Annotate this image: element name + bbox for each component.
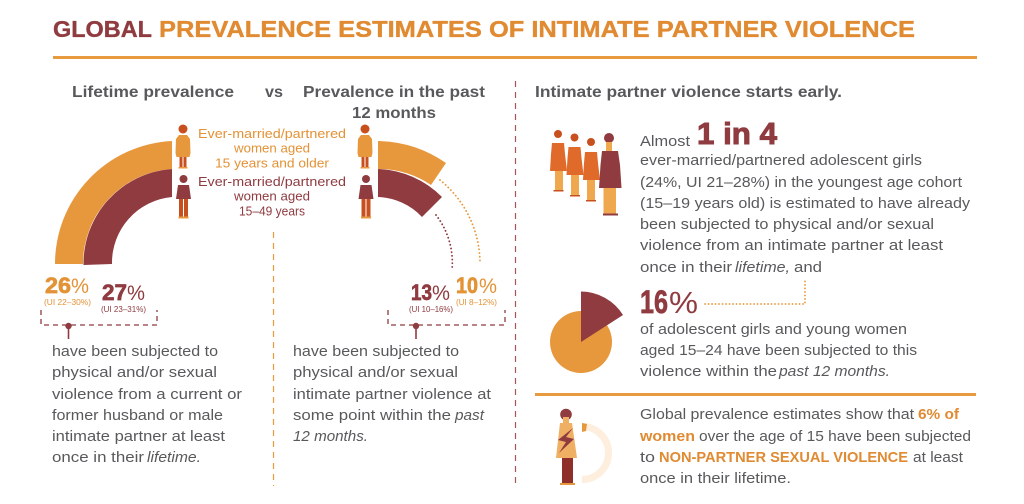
legend: women aged 15 and older: 15 years and older bbox=[215, 156, 330, 170]
text: young women: violence within the bbox=[640, 363, 777, 380]
section headings: Prevalence in the past bbox=[303, 84, 485, 101]
icon: younger woman left bbox=[176, 175, 191, 218]
text: adolescent girls: once in their bbox=[640, 259, 732, 276]
stat: 27 percent: 27 bbox=[102, 280, 127, 305]
stat: 26 percent: (UI 22–30%) bbox=[44, 297, 91, 307]
legend: women aged 15 to 49: Ever-married/partnered bbox=[198, 174, 346, 189]
text: past 12 months description: some point within the bbox=[293, 407, 451, 424]
text: young women: past 12 months. bbox=[778, 363, 890, 380]
legend: women aged 15 and older bbox=[198, 126, 346, 170]
legend: women aged 15 to 49: women aged bbox=[233, 188, 310, 204]
text: past 12 months description: have been subjected to bbox=[293, 343, 459, 360]
chart: pie 16 percent bbox=[550, 292, 623, 373]
text: lifetime description: once in their bbox=[52, 449, 144, 466]
stat: 13 percent: (UI 10–16%) bbox=[409, 304, 453, 314]
text: adolescent girls: lifetime, bbox=[735, 259, 790, 276]
stat: 27 percent bbox=[101, 280, 146, 314]
title: PREVALENCE ESTIMATES OF INTIMATE PARTNER VIOLENCE bbox=[159, 16, 915, 42]
text: adolescent girls: ever-married/partnered adolescent girls bbox=[640, 152, 922, 169]
section headings: 12 months bbox=[352, 105, 436, 122]
text: past 12 months description: 12 months. bbox=[293, 428, 368, 445]
section headings: Intimate partner violence starts early. bbox=[535, 84, 842, 101]
text: lifetime description: violence from a current or bbox=[52, 386, 242, 403]
text: lifetime description: have been subjected to bbox=[52, 343, 218, 360]
stat: 27 percent: (UI 23–31%) bbox=[101, 304, 146, 314]
stat: 27 percent: % bbox=[127, 282, 145, 305]
legend: women aged 15 and older: women aged bbox=[233, 140, 310, 156]
text: past 12 months description bbox=[293, 343, 492, 445]
stat: 26 percent: 26 bbox=[45, 273, 71, 298]
stat: 26 percent: % bbox=[71, 275, 89, 298]
text: past 12 months description: intimate partner violence at bbox=[293, 386, 492, 403]
stat: 10 percent: (UI 8–12%) bbox=[456, 297, 497, 307]
text: young women: aged 15–24 have been subjected to this bbox=[640, 342, 917, 359]
text: lifetime description bbox=[52, 343, 242, 466]
text: non-partner sexual violence: at least bbox=[913, 449, 964, 466]
text: non-partner sexual violence: 6% of bbox=[918, 406, 960, 423]
chart: lifetime prevalence arcs bbox=[55, 141, 172, 265]
text: adolescent girls: and bbox=[794, 259, 822, 276]
text: non-partner sexual violence: NON-PARTNER SEXUAL VIOLENCE bbox=[659, 449, 908, 466]
text: lifetime description: intimate partner at least bbox=[52, 428, 226, 445]
text: lifetime description: physical and/or sexual bbox=[52, 364, 217, 381]
icon: group of four women bbox=[550, 130, 622, 216]
icon: older woman right bbox=[358, 124, 372, 168]
text: adolescent girls: (24%, UI 21–28%) in the youngest age cohort bbox=[640, 174, 963, 191]
stat: 13 percent bbox=[409, 280, 453, 314]
stat: 13 percent: 13 bbox=[411, 280, 432, 305]
stat: 10 percent: % bbox=[479, 275, 497, 298]
stat: 10 percent: 10 bbox=[456, 273, 478, 298]
section headings: vs bbox=[265, 84, 283, 101]
text: non-partner sexual violence: Global prevalence estimates show that bbox=[640, 406, 915, 423]
text: lifetime description: former husband or male bbox=[52, 407, 223, 424]
text: non-partner sexual violence: once in their lifetime. bbox=[640, 470, 791, 487]
text: lifetime description: lifetime. bbox=[147, 449, 201, 466]
stat: 1 in 4: Almost bbox=[640, 133, 691, 150]
section headings bbox=[72, 84, 842, 122]
icon: younger woman right bbox=[358, 175, 374, 218]
icon: older woman left bbox=[176, 124, 190, 168]
title: GLOBAL bbox=[53, 16, 152, 42]
text: adolescent girls: (15–19 years old) is estimated to have already bbox=[640, 195, 971, 212]
section headings: Lifetime prevalence bbox=[72, 84, 234, 101]
stat: 16 percent: 16 bbox=[640, 284, 668, 320]
stat: 13 percent: % bbox=[432, 282, 450, 305]
text: non-partner sexual violence: women bbox=[639, 428, 695, 445]
chart: past 12 months arcs bbox=[378, 141, 480, 270]
stat: 16 percent bbox=[640, 284, 698, 320]
text: young women bbox=[640, 321, 917, 380]
stat: 26 percent bbox=[44, 273, 91, 307]
text: non-partner sexual violence: to bbox=[640, 449, 655, 466]
text: past 12 months description: past bbox=[454, 407, 485, 424]
bracket right bbox=[388, 310, 505, 339]
text: non-partner sexual violence bbox=[639, 406, 971, 487]
stat: 10 percent bbox=[456, 273, 497, 307]
text: non-partner sexual violence: over the age of 15 have been subjected bbox=[699, 428, 971, 445]
stat: 16 percent: % bbox=[669, 285, 698, 320]
stat: 1 in 4: 1 in 4 bbox=[697, 116, 778, 151]
legend: women aged 15 to 49: 15–49 years bbox=[239, 204, 305, 218]
legend: women aged 15 to 49 bbox=[198, 174, 346, 218]
text: adolescent girls: violence from an intimate partner at least bbox=[640, 237, 944, 254]
text: young women: of adolescent girls and young women bbox=[640, 321, 907, 338]
icon: woman with lightning bolt and ring bbox=[556, 409, 608, 485]
text: adolescent girls: been subjected to physical and/or sexual bbox=[640, 216, 934, 233]
stat: 1 in 4 bbox=[640, 116, 778, 151]
legend: women aged 15 and older: Ever-married/partnered bbox=[198, 126, 346, 141]
bracket left bbox=[41, 310, 157, 339]
text: adolescent girls bbox=[640, 152, 971, 276]
text: past 12 months description: physical and/or sexual bbox=[293, 364, 458, 381]
